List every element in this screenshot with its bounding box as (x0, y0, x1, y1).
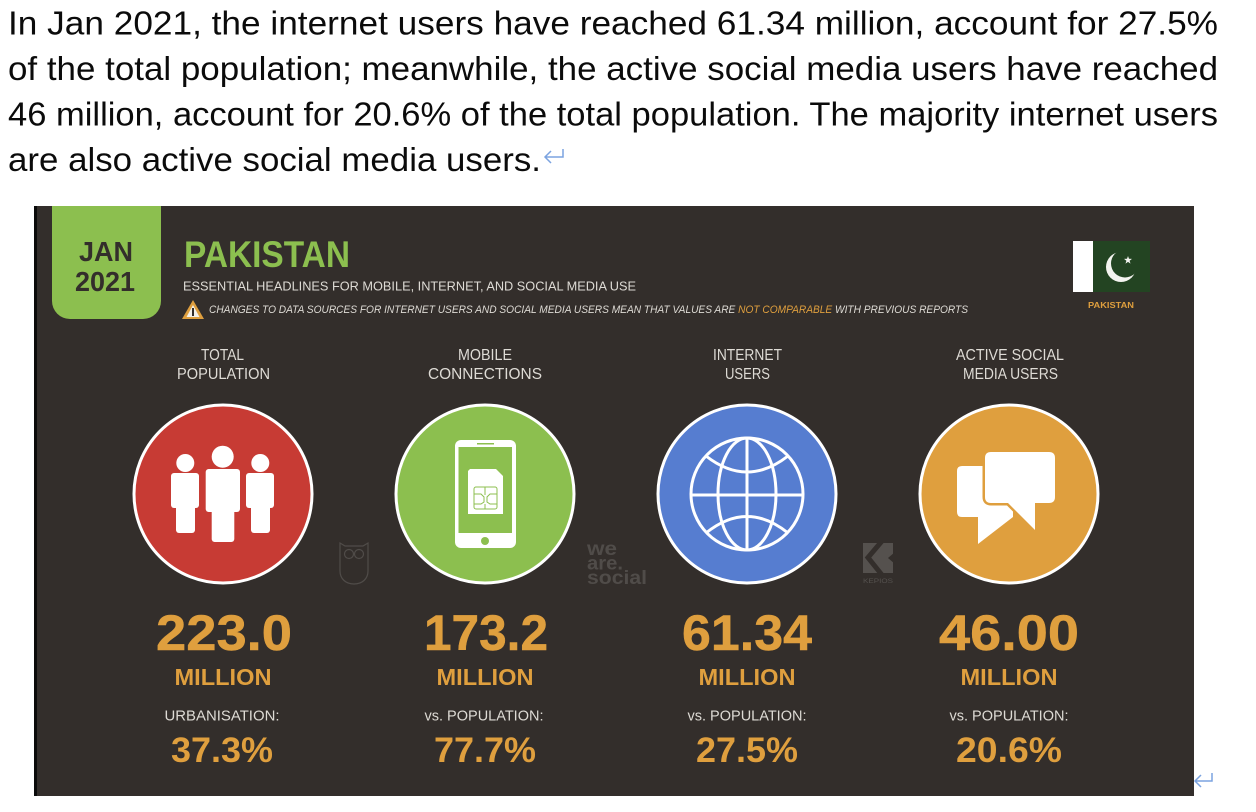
intro text block: of the total population; meanwhile, the active social media users have reached (8, 51, 1218, 88)
label (713, 347, 782, 383)
icon: warning triangle (182, 300, 204, 319)
label: USERS (725, 366, 770, 383)
logo: we are social (586, 539, 647, 589)
date tab: JAN (79, 236, 133, 267)
unit: MILLION (174, 664, 272, 690)
icon: people (134, 405, 312, 583)
logo: owl (340, 543, 368, 584)
unit: MILLION (960, 664, 1058, 690)
column: internet users (658, 347, 836, 770)
label: MEDIA USERS (963, 366, 1058, 383)
column: total population (134, 347, 312, 770)
icon: speech bubbles (920, 405, 1098, 583)
intro text block: In Jan 2021, the internet users have reached 61.34 million, account for 27.5% (8, 6, 1218, 42)
value: 173.2 (424, 605, 548, 661)
icon: phone with SIM (396, 405, 574, 583)
icon: Pakistan flag (1073, 241, 1150, 310)
label: ACTIVE SOCIAL (956, 347, 1064, 364)
value: 61.34 (682, 605, 812, 661)
unit: MILLION (436, 664, 534, 690)
label: MOBILE (458, 347, 512, 364)
icon: paragraph return mark (545, 149, 563, 163)
label: POPULATION (177, 366, 270, 383)
sub label: vs. POPULATION: (688, 708, 806, 724)
unit: MILLION (698, 664, 796, 690)
label: INTERNET (713, 347, 782, 364)
logo: we are social: social (587, 568, 647, 589)
column: active social media users (920, 347, 1098, 770)
value: 46.00 (939, 605, 1079, 661)
label: CONNECTIONS (428, 366, 542, 383)
icon: closing return mark (1195, 773, 1212, 787)
data source notice: CHANGES TO DATA SOURCES FOR INTERNET USERS AND SOCIAL MEDIA USERS MEAN THAT VALUES ARE NOT COMPARABLE WITH PREVIOUS REPORTS (209, 304, 969, 316)
logo: we are social: are. (587, 554, 623, 574)
label (956, 347, 1064, 383)
intro text block: 46 million, account for 20.6% of the total population. The majority internet users (8, 96, 1218, 134)
label (428, 347, 542, 383)
label: TOTAL (201, 347, 244, 364)
percentage: 77.7% (434, 731, 536, 770)
percentage: 27.5% (696, 731, 798, 770)
percentage: 37.3% (171, 731, 273, 770)
value: 223.0 (156, 605, 292, 661)
logo: we are social: we (586, 539, 617, 560)
date tab (52, 206, 161, 319)
intro text block (8, 6, 1218, 179)
icon: globe (658, 405, 836, 583)
percentage: 20.6% (956, 731, 1062, 770)
sub label: vs. POPULATION: (424, 708, 544, 724)
subtitle: ESSENTIAL HEADLINES FOR MOBILE, INTERNET, AND SOCIAL MEDIA USE (183, 278, 636, 294)
intro text block: are also active social media users. (8, 142, 541, 179)
label (177, 347, 270, 383)
sub label: URBANISATION: (164, 708, 280, 724)
date tab: 2021 (75, 266, 135, 297)
logo: Kepios (863, 541, 895, 585)
column: mobile connections (396, 347, 574, 770)
panel: infographic (34, 206, 1194, 796)
sub label: vs. POPULATION: (950, 708, 1068, 724)
icon: Pakistan flag: PAKISTAN (1088, 301, 1134, 310)
logo: Kepios: KEPIOS (863, 578, 894, 585)
heading: country: PAKISTAN (184, 234, 350, 275)
